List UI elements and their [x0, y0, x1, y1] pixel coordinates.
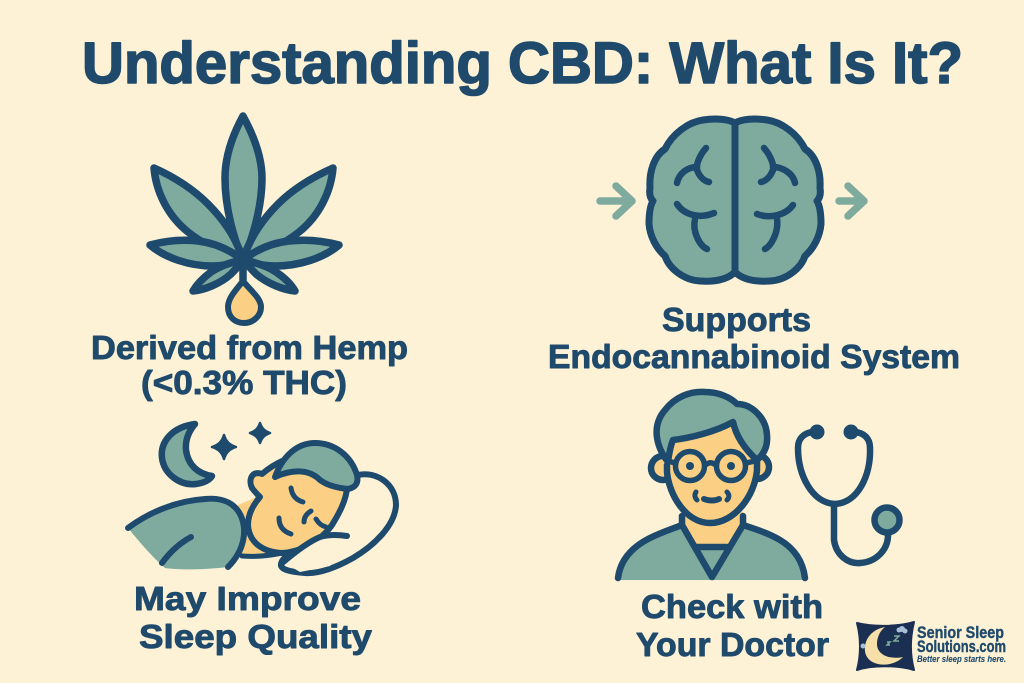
label: may improve sleep quality: [134, 580, 373, 655]
label: supports endocannabinoid system: Endocannabinoid System: [548, 338, 960, 375]
icon: hemp leaf with oil drop: [150, 116, 339, 323]
logo text: Better sleep starts here.: [917, 654, 1006, 665]
icon: stethoscope: [798, 425, 900, 563]
icon: moon: [162, 424, 212, 484]
label: derived from hemp: Derived from Hemp: [91, 329, 408, 366]
title: Understanding CBD: What Is It?: [82, 31, 963, 96]
panel: derived from hemp: [91, 116, 408, 401]
icon: star large: [212, 435, 236, 459]
label: check with your doctor: Your Doctor: [636, 626, 829, 663]
panel: sleep quality: [128, 423, 396, 655]
icon: sleeping person: [128, 443, 396, 573]
panel: endocannabinoid system: [548, 119, 960, 375]
panel: check with your doctor: [618, 392, 900, 663]
label: derived from hemp: (<0.3% THC): [141, 364, 347, 401]
icon: right arrow: [839, 186, 864, 216]
icon: brain: [649, 119, 821, 281]
label: may improve sleep quality: May Improve: [134, 580, 361, 617]
icon: left arrow: [600, 186, 632, 216]
label: check with your doctor: [636, 588, 829, 663]
label: supports endocannabinoid system: Supports: [662, 301, 811, 338]
label: may improve sleep quality: Sleep Quality: [139, 618, 373, 655]
logo text: [917, 623, 1006, 665]
icon: star small: [250, 423, 270, 443]
logo: senior sleep solutions: [857, 622, 1006, 670]
icon: pillow with moon: [857, 622, 914, 670]
label: supports endocannabinoid system: [548, 301, 960, 375]
label: derived from hemp: [91, 329, 408, 401]
icon: doctor: [618, 392, 805, 580]
label: check with your doctor: Check with: [641, 588, 823, 625]
logo text: Senior Sleep: [917, 623, 1004, 642]
